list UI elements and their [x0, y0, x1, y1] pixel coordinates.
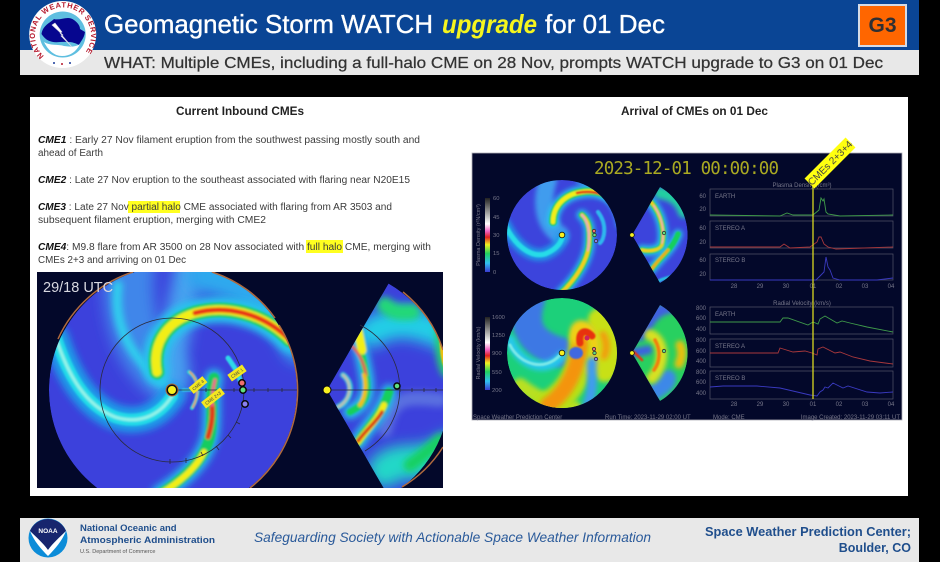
plot labels: 30: [783, 402, 790, 408]
plot labels: 600: [696, 316, 707, 322]
model footer text: Space Weather Prediction Center: [473, 415, 562, 421]
CME3 description: [38, 202, 392, 226]
title: [104, 9, 665, 39]
NOAA name: National Oceanic and: [80, 523, 177, 534]
center name: Space Weather Prediction Center;: [705, 525, 911, 539]
CME3 description: CME3 : Late 27 Nov partial halo CME associated with flaring from AR 3503 and: [38, 202, 392, 213]
model footer text: Image Created: 2023-11-29 03:11 UT: [801, 415, 900, 421]
brown outer arcs: [58, 272, 298, 488]
CME4 description: CME4: M9.8 flare from AR 3500 on 28 Nov associated with full halo CME, merging with: [38, 242, 431, 253]
NOAA name: Atmospheric Administration: [80, 535, 215, 546]
footer band: [20, 518, 919, 562]
plot labels: 60: [699, 258, 707, 264]
G3 scale badge: [859, 5, 906, 46]
colour bars: 60: [493, 196, 499, 202]
NOAA name: U.S. Department of Commerce: [80, 549, 156, 555]
callout: CMEs 2+3+4: CMEs 2+3+4: [806, 139, 856, 188]
plot labels: 800: [696, 370, 707, 376]
plot labels: 400: [696, 327, 707, 333]
plot labels: STEREO B: [715, 258, 745, 264]
title: Geomagnetic Storm WATCH: [104, 9, 433, 39]
plot labels: 600: [696, 380, 707, 386]
plot labels: 600: [696, 349, 707, 355]
CME1 description: CME1 : Early 27 Nov filament eruption from the southwest passing mostly south and: [38, 135, 420, 146]
density wedge: [632, 187, 688, 285]
plot labels: 60: [699, 226, 707, 232]
icon: NOAA logo: [28, 518, 68, 558]
CME4 description: [38, 242, 431, 266]
colour bars: 15: [493, 251, 499, 257]
velocity wedge: [632, 305, 688, 401]
CME highlights: [128, 201, 343, 253]
plot labels: 02: [836, 284, 843, 290]
colour bars: 900: [492, 351, 502, 357]
plot labels: 04: [888, 402, 895, 408]
CME3 description: subsequent filament eruption, merging with CME2: [38, 215, 266, 226]
header banner: [20, 0, 919, 75]
plot labels: 01: [810, 284, 817, 290]
CME1 description: [38, 135, 420, 159]
plot labels: 30: [783, 284, 790, 290]
plot labels: Plasma Density (/cm³): [772, 183, 832, 189]
spacecraft markers: [239, 380, 248, 407]
plot labels: 02: [836, 402, 843, 408]
heading: arrival of CMEs: Arrival of CMEs on 01 Dec: [621, 104, 768, 118]
icon: NOAA logo: NOAA: [38, 528, 58, 535]
CME tags: [189, 365, 247, 409]
plot frames: [710, 189, 893, 399]
density disc: [505, 180, 620, 294]
plot labels: 400: [696, 359, 707, 365]
plot labels: 29: [757, 402, 764, 408]
title: upgrade: [442, 9, 537, 39]
chart: WSA-Enlil model output 2023-12-01: [472, 137, 902, 421]
colour bars: 1250: [492, 333, 505, 339]
panel: white content area: [30, 97, 908, 496]
model markers: [559, 229, 666, 361]
arrival marker line: [812, 178, 814, 399]
center name: [705, 525, 911, 555]
CME2 description: CME2 : Late 27 Nov eruption to the southeast associated with flaring near N20E15: [38, 175, 411, 186]
NOAA name: [80, 523, 215, 555]
plot labels: 20: [699, 207, 707, 213]
plot labels: 60: [699, 194, 707, 200]
CME1 description: ahead of Earth: [38, 148, 103, 159]
plot labels: STEREO B: [715, 376, 745, 382]
colour bars: 45: [493, 215, 499, 221]
model timestamp: 2023-12-01 00:00:00: [594, 159, 779, 179]
colour bars: [476, 196, 505, 394]
big density disc: [49, 272, 297, 488]
side wedge: [329, 284, 443, 488]
plot labels: EARTH: [715, 312, 735, 318]
CME4 description: CMEs 2+3 and arriving on 01 Dec: [38, 255, 186, 266]
plot labels: [696, 183, 895, 408]
panel: current inbound CMEs text: [38, 104, 431, 266]
timestamp: 29/18 UTC: [43, 280, 113, 296]
wedge outer arcs: [402, 292, 443, 487]
colour bars: 200: [492, 388, 502, 394]
colour bars: 0: [493, 270, 496, 276]
subtitle: WHAT: Multiple CMEs, including a full-halo CME on 28 Nov, prompts WATCH upgrade to G3 on 01 Dec: [104, 55, 883, 72]
plot labels: 400: [696, 391, 707, 397]
title: for 01 Dec: [545, 9, 665, 39]
CME tags: CME 4: [191, 379, 205, 391]
colour bars: 550: [492, 370, 502, 376]
plot labels: Radial Velocity (km/s): [773, 301, 831, 307]
plot labels: 800: [696, 306, 707, 312]
G3 scale badge: G3: [868, 14, 897, 37]
plot labels: 20: [699, 240, 707, 246]
model footer text: Run Time: 2023-11-29 02:00 UT: [605, 415, 691, 421]
plot labels: 04: [888, 284, 895, 290]
model footer text: [473, 415, 900, 421]
wedge markers: [323, 383, 400, 394]
plot labels: 01: [810, 402, 817, 408]
wedge orbit and axis: [327, 325, 443, 451]
plot labels: STEREO A: [715, 226, 745, 232]
velocity disc: [507, 298, 617, 410]
plot labels: 20: [699, 272, 707, 278]
plot labels: 29: [757, 284, 764, 290]
plot labels: EARTH: [715, 194, 735, 200]
model footer text: Mode: CME: [713, 415, 745, 421]
orbit circle and axis: [100, 318, 297, 464]
chart: WSA-Enlil snapshot 29/18 UTC: [37, 272, 443, 488]
plot labels: 28: [731, 402, 738, 408]
CME tags: CME 2+3: [204, 390, 222, 406]
icon: National Weather Service logo: NATIONAL WEATHER SERVICE: [30, 2, 96, 60]
CME tags: CME 1: [230, 367, 245, 379]
plot labels: 800: [696, 338, 707, 344]
plot labels: STEREO A: [715, 344, 745, 350]
plot labels: 03: [862, 284, 869, 290]
sun marker: [166, 384, 178, 396]
colour bars: 30: [493, 233, 499, 239]
center name: Boulder, CO: [839, 541, 911, 555]
slogan: Safeguarding Society with Actionable Space Weather Information: [254, 529, 651, 545]
colour bars: 1600: [492, 315, 505, 321]
colour bars: Plasma Density (r²N/cm³): [476, 204, 482, 266]
colour bars: Radial Velocity (km/s): [476, 326, 482, 379]
time-series panels: [696, 183, 895, 408]
plot labels: 03: [862, 402, 869, 408]
heading: current inbound CMEs: Current Inbound CMEs: [176, 104, 304, 118]
plot labels: 28: [731, 284, 738, 290]
time-series lines: [710, 198, 893, 396]
